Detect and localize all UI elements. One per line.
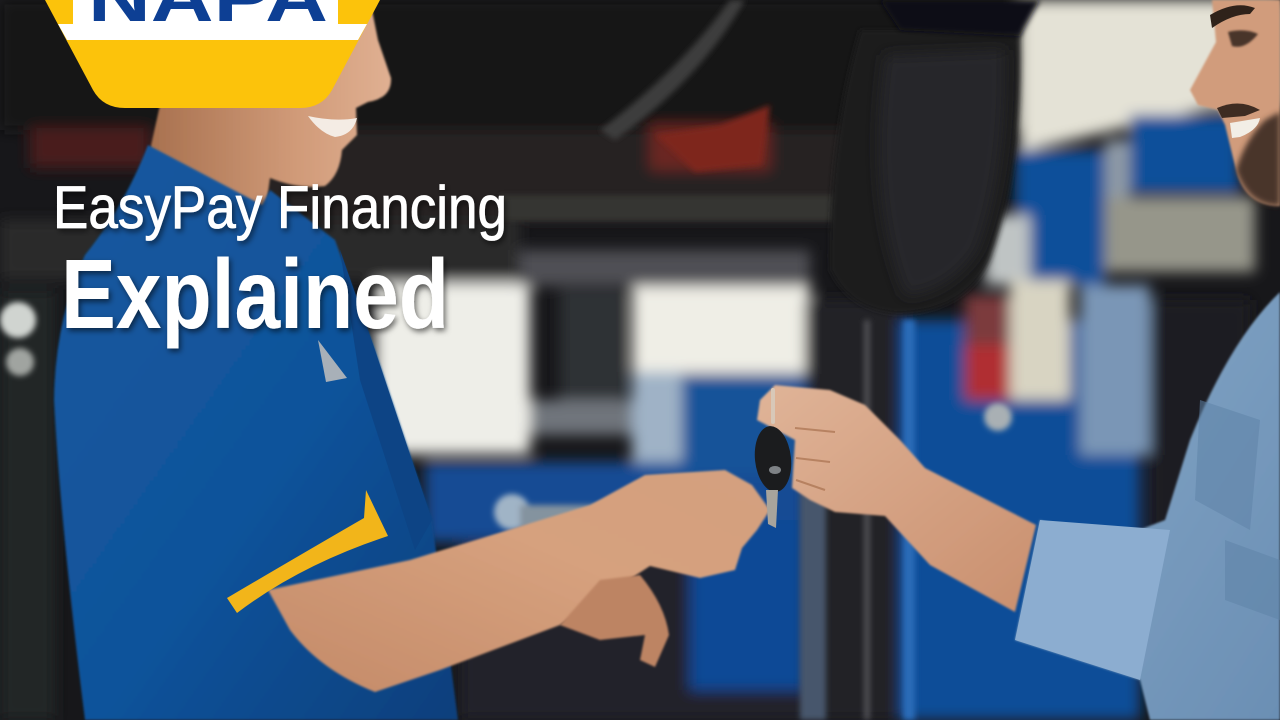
teeth (1230, 118, 1260, 138)
customer: right man (757, 0, 1280, 720)
shirt placket and badge (318, 340, 347, 382)
arm and hand (757, 385, 1036, 612)
icon: car key (752, 388, 794, 528)
tire (830, 0, 1040, 314)
face (1190, 0, 1280, 206)
eye (1228, 30, 1258, 47)
mechanic: left man (54, 0, 770, 720)
blue shirt (54, 145, 458, 720)
logo: NAPA badge (45, 0, 380, 108)
lower hand (560, 575, 669, 667)
smile (308, 116, 357, 137)
title (53, 174, 507, 349)
forearm and hand (268, 470, 770, 692)
sleeve with yellow trim (227, 490, 388, 613)
denim shirt (1015, 292, 1280, 720)
eyebrow (1210, 5, 1255, 28)
title line 2: Explained (61, 239, 449, 349)
head and neck (150, 0, 391, 215)
title line 1: EasyPay Financing (53, 174, 507, 241)
beard (1236, 112, 1280, 206)
moustache (1217, 103, 1260, 118)
